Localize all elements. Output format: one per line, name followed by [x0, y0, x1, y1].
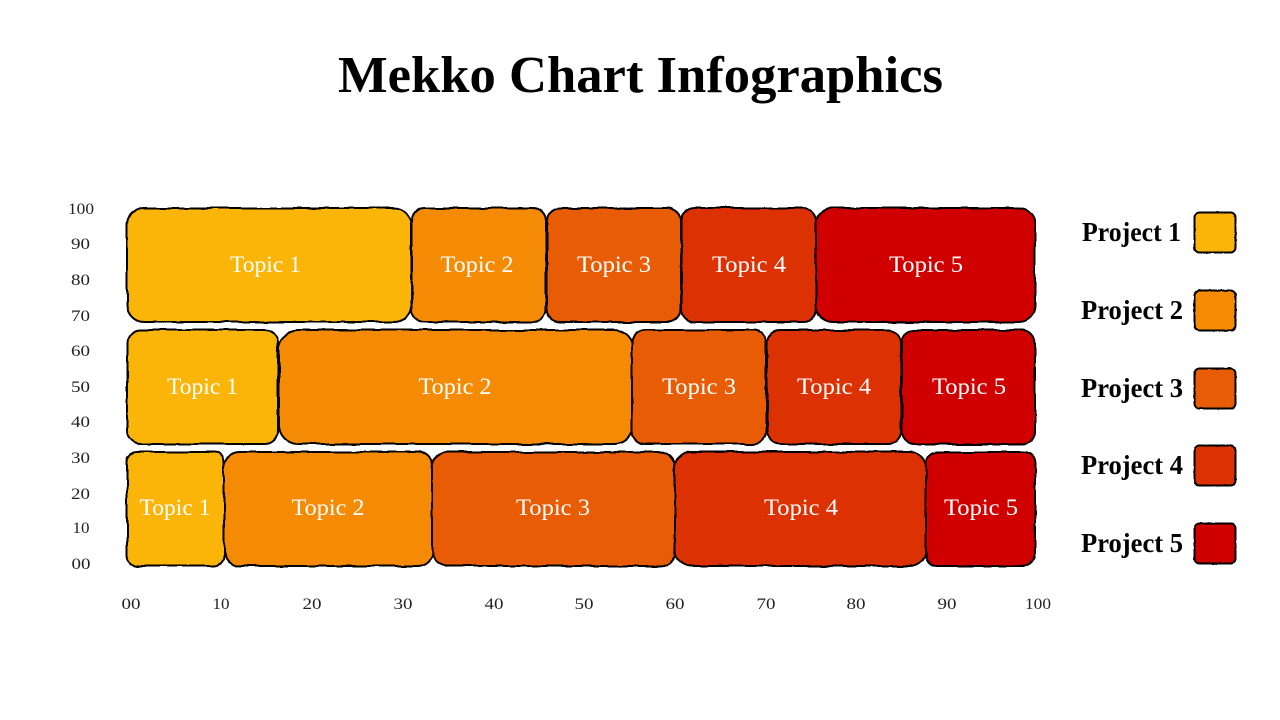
x axis labels: 10 [212, 596, 230, 613]
y axis labels: 100 [68, 201, 94, 218]
y axis labels: 00 [72, 556, 90, 573]
legend item: project 5 [1081, 524, 1236, 564]
legend item: project 3: Project 3 [1081, 373, 1183, 403]
x axis labels: 00 [122, 596, 140, 613]
cell: row 3 topic 2 [224, 452, 433, 566]
legend [1081, 212, 1236, 564]
cell: row 1 topic 3 [547, 208, 681, 322]
y axis labels: 20 [71, 486, 90, 503]
cell: row 3 topic 1: Topic 1 [140, 495, 210, 521]
legend item: project 2: Project 2 [1081, 295, 1183, 325]
top mekko row [127, 208, 1035, 322]
y axis labels: 80 [71, 272, 90, 289]
y axis labels: 60 [71, 343, 90, 360]
cell: row 1 topic 3: Topic 3 [577, 252, 651, 278]
cell: row 3 topic 1 [127, 452, 224, 566]
cell: row 2 topic 5: Topic 5 [932, 374, 1006, 400]
cell: row 3 topic 4: Topic 4 [764, 495, 838, 521]
cell: row 1 topic 5: Topic 5 [889, 252, 963, 278]
cell: row 2 topic 5 [902, 330, 1035, 444]
legend item: project 1: Project 1 [1082, 217, 1181, 247]
cell: row 1 topic 5 [816, 208, 1035, 322]
y axis labels: 50 [71, 379, 90, 396]
cell: row 1 topic 1 [127, 208, 411, 322]
cell: row 2 topic 4 [767, 330, 901, 444]
cell: row 1 topic 4: Topic 4 [712, 252, 786, 278]
cell: row 1 topic 4 [682, 208, 816, 322]
y axis labels: 70 [71, 308, 90, 325]
cell: row 3 topic 3 [432, 452, 676, 566]
cell: row 3 topic 5 [926, 452, 1035, 566]
x axis labels: 80 [846, 596, 866, 613]
x axis labels: 50 [574, 596, 594, 613]
cell: row 3 topic 2: Topic 2 [292, 495, 364, 521]
x axis labels: 60 [666, 596, 684, 613]
cell: row 3 topic 3: Topic 3 [516, 495, 590, 521]
cell: row 2 topic 2: Topic 2 [418, 374, 492, 400]
y axis labels: 10 [72, 520, 90, 537]
x axis labels: 30 [394, 596, 412, 613]
title: Mekko Chart Infographics [338, 47, 943, 104]
legend item: project 2 [1081, 290, 1236, 330]
cell: row 1 topic 1: Topic 1 [230, 252, 301, 278]
x axis labels: 70 [756, 596, 776, 613]
cell: row 3 topic 4 [675, 452, 926, 566]
x axis labels: 100 [1025, 596, 1051, 613]
cell: row 2 topic 1: Topic 1 [167, 374, 238, 400]
cell: row 1 topic 2: Topic 2 [440, 252, 514, 278]
legend item: project 5: Project 5 [1081, 528, 1183, 558]
cell: row 3 topic 5: Topic 5 [944, 495, 1018, 521]
legend item: project 3 [1081, 368, 1236, 408]
y axis labels: 40 [71, 414, 90, 431]
y axis labels: 90 [71, 236, 90, 253]
bottom mekko row [127, 452, 1035, 566]
middle mekko row [127, 330, 1035, 444]
cell: row 2 topic 4: Topic 4 [797, 374, 871, 400]
cell: row 2 topic 3: Topic 3 [662, 374, 736, 400]
cell: row 2 topic 3 [632, 330, 766, 444]
cell: row 2 topic 2 [279, 330, 633, 444]
x axis labels [122, 596, 1051, 613]
y axis labels [68, 201, 94, 573]
x axis labels: 20 [302, 596, 322, 613]
y axis labels: 30 [71, 450, 90, 467]
x axis labels: 90 [938, 596, 956, 613]
legend item: project 4 [1081, 446, 1236, 486]
x axis labels: 40 [484, 596, 504, 613]
cell: row 1 topic 2 [412, 208, 546, 322]
legend item: project 4: Project 4 [1081, 450, 1183, 480]
legend item: project 1 [1082, 212, 1236, 252]
cell: row 2 topic 1 [127, 330, 278, 444]
